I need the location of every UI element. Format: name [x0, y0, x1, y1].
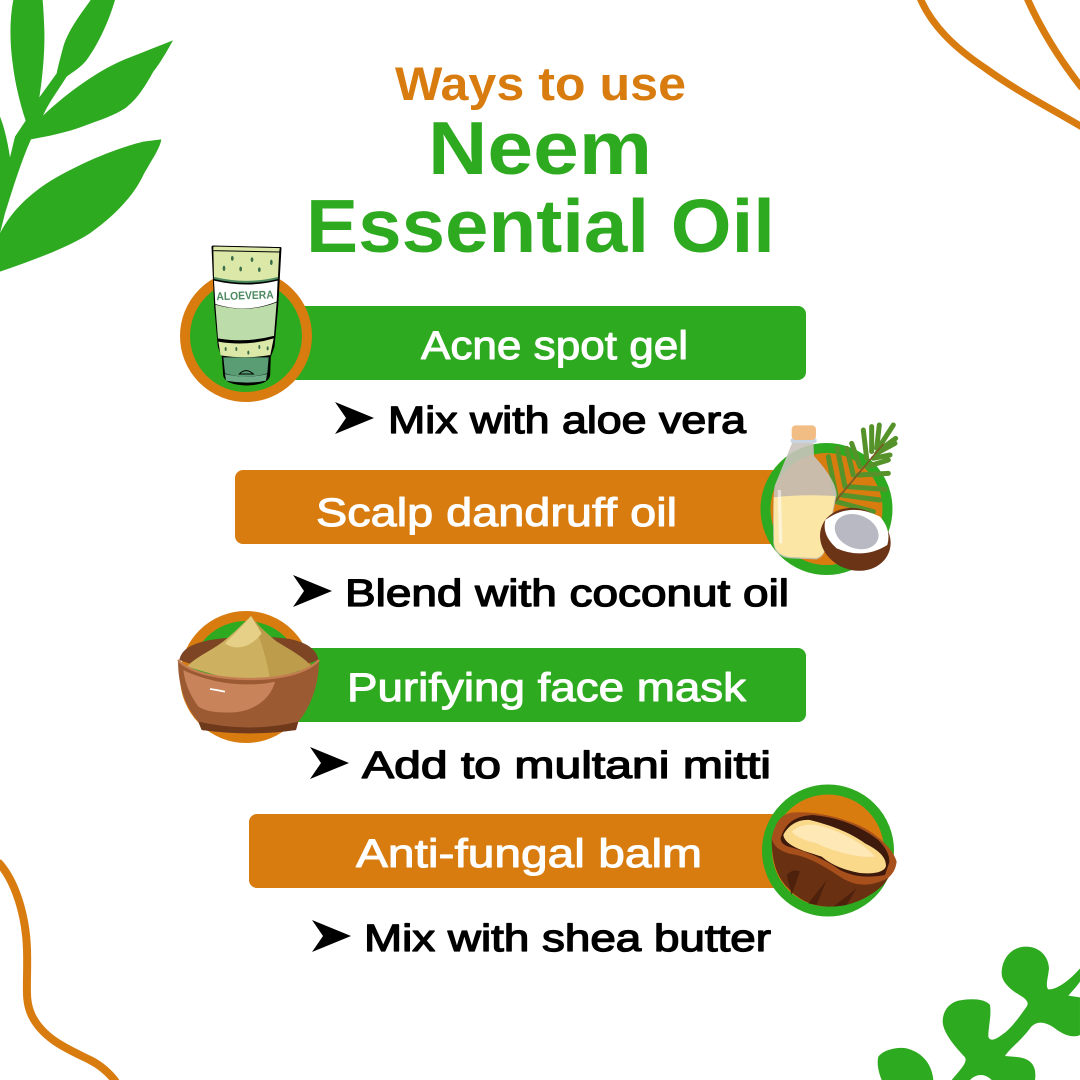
instruction: mix with aloe vera — [335, 400, 747, 442]
instruction: mix with shea butter — [312, 918, 771, 960]
badge circle — [185, 275, 307, 397]
curve bottom left — [0, 862, 116, 1080]
banner text: Anti-fungal balm — [356, 832, 702, 876]
instruction text: Mix with aloe vera — [388, 400, 747, 442]
banner: acne spot gel — [280, 306, 806, 380]
badge circle — [766, 448, 888, 570]
icon: shea butter in shell — [772, 812, 897, 907]
banner: anti-fungal balm — [249, 814, 799, 888]
panel: purifying face mask — [178, 616, 806, 738]
banner text: Acne spot gel — [421, 324, 688, 368]
title line: Essential Oil: Essential Oil — [306, 184, 775, 268]
arrow — [310, 747, 349, 779]
plant bottom right — [878, 947, 1080, 1080]
title line: Neem: Neem — [428, 106, 652, 190]
instruction text: Add to multani mitti — [362, 745, 771, 787]
title — [306, 57, 775, 268]
banner text: Purifying face mask — [347, 666, 747, 710]
icon: oil bottle, palm and coconut — [773, 425, 900, 581]
panel: scalp dandruff oil — [235, 425, 900, 581]
instruction text: Mix with shea butter — [364, 918, 771, 960]
panel: acne spot gel — [185, 246, 806, 397]
banner text: Scalp dandruff oil — [316, 491, 677, 535]
badge circle — [767, 790, 889, 912]
arrow — [293, 575, 332, 607]
panel: anti-fungal balm — [249, 790, 897, 912]
curves top right — [920, 0, 1080, 127]
icon: bowl of multani mitti — [178, 616, 319, 733]
icon: aloe vera tube — [212, 246, 281, 385]
leaf branch top left — [0, 0, 173, 272]
badge circle — [185, 616, 307, 738]
banner: scalp dandruff oil — [235, 470, 795, 544]
title line: Ways to use: Ways to use — [395, 57, 686, 110]
arrow — [335, 402, 374, 434]
icon: aloe vera tube: ALOEVERA — [216, 289, 274, 303]
arrow — [312, 920, 351, 952]
instruction text: Blend with coconut oil — [345, 573, 789, 615]
instruction: add to multani mitti — [310, 745, 771, 787]
banner: purifying face mask — [280, 648, 806, 722]
instruction: blend with coconut oil — [293, 573, 789, 615]
